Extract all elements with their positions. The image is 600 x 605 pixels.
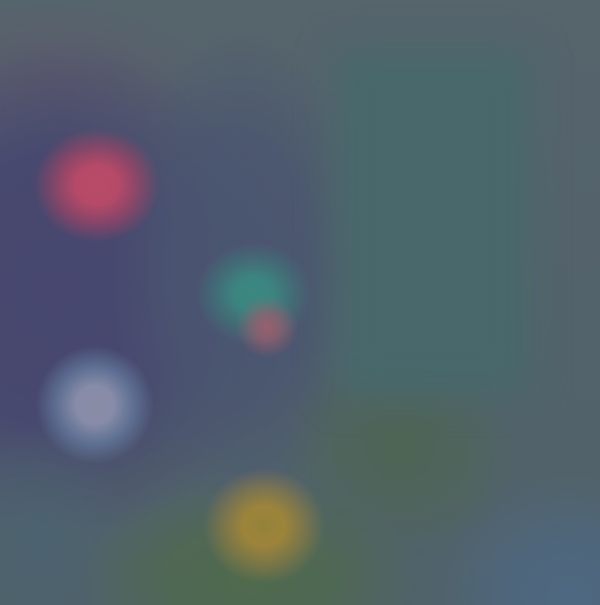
teal blob	[196, 242, 312, 346]
red blob	[34, 128, 160, 242]
pale blue blob	[36, 346, 154, 464]
small pink blob	[236, 296, 298, 358]
amber blob	[203, 468, 325, 584]
right teal field	[335, 50, 530, 395]
